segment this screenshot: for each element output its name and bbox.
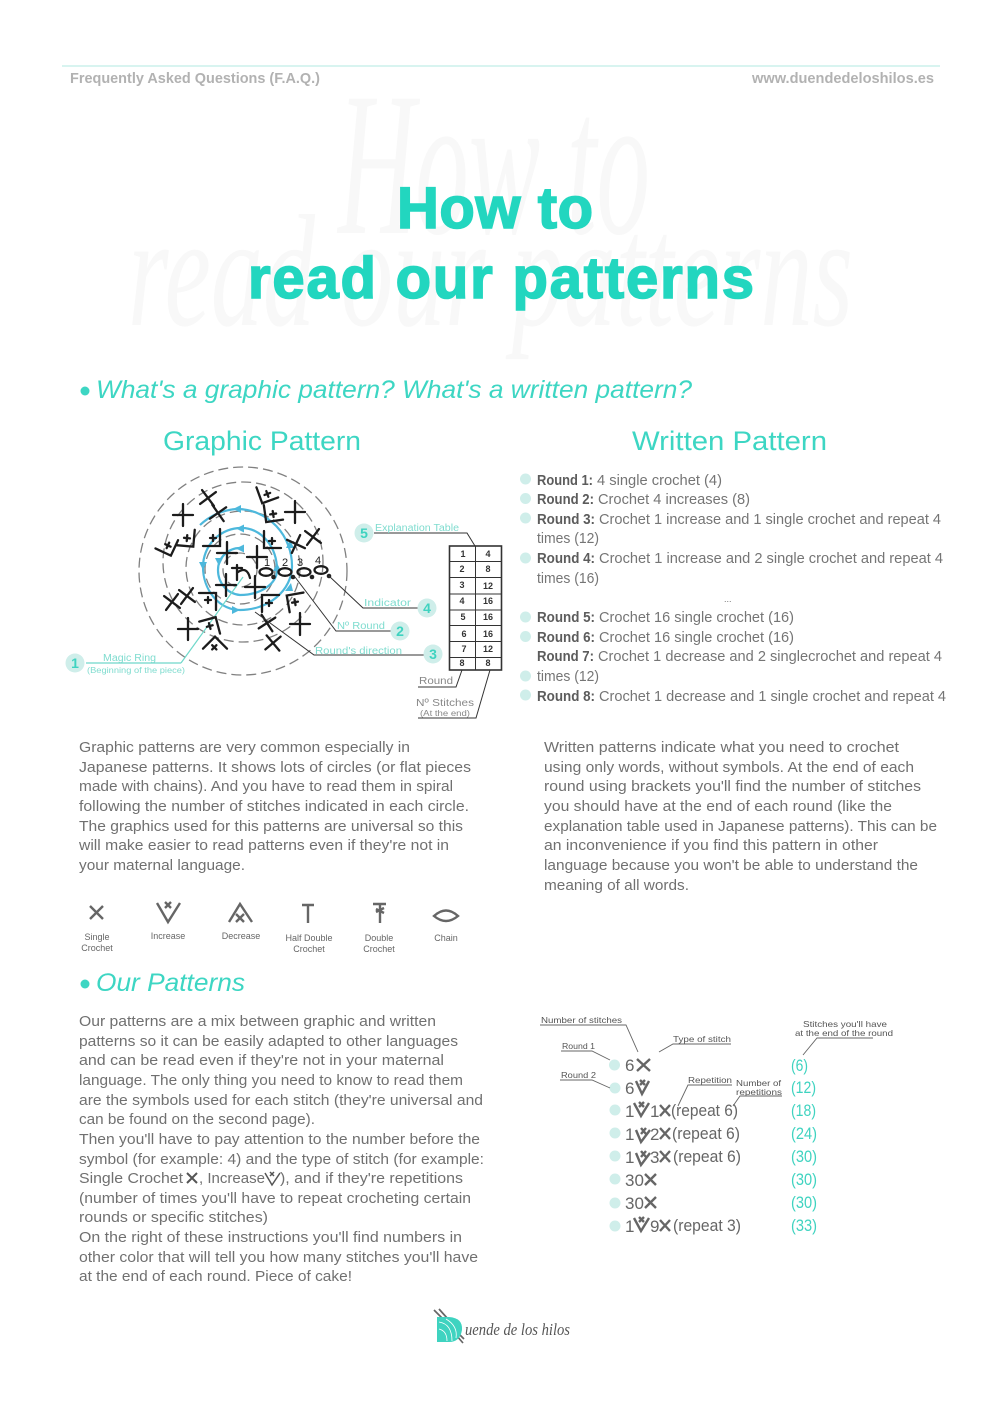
callout 4: indicator: Indicator <box>364 598 412 609</box>
logo: uende de los hilos <box>465 1320 570 1339</box>
header right text: www.duendedeloshilos.es <box>751 70 934 87</box>
section heading: our patterns: Our Patterns <box>96 969 245 997</box>
explanation table: 2 <box>459 564 465 574</box>
table label: round <box>418 670 462 687</box>
annotated pattern example: (repeat 6) <box>672 1124 740 1143</box>
explanation table: 8 <box>485 564 491 574</box>
annotated pattern example: 1 <box>625 1102 634 1121</box>
icon: double crochet: Crochet <box>363 944 395 954</box>
explanation table: 12 <box>483 644 493 654</box>
annotated pattern example: 1 <box>625 1217 634 1236</box>
written pattern list: Round 6: <box>537 629 595 646</box>
chain stitches and magic ring <box>232 565 328 580</box>
text block: written pattern explanation: round using brackets you'll find the number of stitches <box>544 778 921 795</box>
text block: graphic pattern explanation: made with chains). And you have to read them in spiral <box>79 778 453 795</box>
callout 5: explanation table <box>354 523 475 546</box>
icon: decrease: Decrease <box>222 931 260 941</box>
increase stitches <box>155 481 306 661</box>
callout 5: explanation table: 5 <box>360 525 368 541</box>
pattern annotations: Repetition <box>688 1075 732 1085</box>
icon: increase <box>151 902 185 941</box>
written pattern list: Crochet 1 decrease and 2 singlecrochet and repeat 4 <box>598 648 942 665</box>
annotated pattern example: (30) <box>791 1147 817 1166</box>
callout 3: round direction: Round's direction <box>315 646 402 657</box>
icon: double crochet: Double <box>365 933 393 943</box>
text block: written pattern explanation: using only words, without symbols. At the end of each <box>544 759 914 776</box>
annotated pattern example: 3 <box>650 1148 659 1167</box>
text block: graphic pattern explanation: will make easier to read patterns even if they're not in <box>78 837 449 854</box>
text block: our patterns explanation: other color that will tell you how many stitches you'll have <box>79 1249 478 1266</box>
magic ring pointer <box>181 577 243 663</box>
icon: double crochet <box>363 904 395 954</box>
written pattern list: Round 3: <box>537 511 595 528</box>
annotated pattern example: 30 <box>625 1194 644 1213</box>
written pattern list: Round 5: <box>537 609 595 626</box>
text block: written pattern explanation: language because you won't be able to understand the <box>544 857 918 874</box>
explanation table: 5 <box>460 612 466 622</box>
text block: written pattern explanation: you should have at the end of each round (like the <box>544 798 892 815</box>
annotated pattern example: (6) <box>791 1056 808 1075</box>
written pattern list: Crochet 1 decrease and 1 single crochet and repeat 4 <box>599 688 946 705</box>
section heading: graphic and written: What's a graphic pattern? What's a written pattern? <box>96 376 692 404</box>
written pattern list: Round 4: <box>537 550 595 567</box>
annotated pattern example: (repeat 6) <box>673 1147 741 1166</box>
icon: single crochet: Single <box>84 932 110 942</box>
written pattern list <box>520 472 946 705</box>
round direction spiral <box>199 505 294 614</box>
icon: chain: Chain <box>434 933 458 943</box>
icon: half double crochet: Half Double <box>285 933 333 943</box>
text block: written pattern explanation: Written patterns indicate what you need to crochet <box>544 739 900 756</box>
annotated pattern example: 1 <box>650 1102 659 1121</box>
text block: our patterns explanation: and can be read even if they're not in your maternal <box>79 1052 444 1069</box>
explanation table: 12 <box>483 581 493 591</box>
text block: our patterns explanation: (number of times you'll have to repeat crocheting certain <box>79 1190 471 1207</box>
pattern annotations: Number of <box>736 1078 782 1088</box>
text block: our patterns explanation: Our patterns are a mix between graphic and written <box>79 1013 436 1030</box>
written pattern list: Crochet 1 increase and 1 single crochet and repeat 4 <box>599 511 941 528</box>
callout 2: round number <box>295 577 410 640</box>
header rule <box>62 65 940 67</box>
text block: graphic pattern explanation: following the number of stitches indicated in each circle. <box>79 798 469 815</box>
annotated pattern example: (repeat 3) <box>673 1216 741 1235</box>
callout 4: indicator <box>329 576 436 618</box>
explanation table: 3 <box>459 580 465 590</box>
explanation table: 4 <box>485 549 491 559</box>
text block: our patterns explanation: , Increase <box>199 1170 265 1187</box>
text block: graphic pattern explanation: Japanese patterns. It shows lots of circles (or flat pieces <box>79 759 471 776</box>
callout 1: magic ring: Magic Ring <box>103 653 156 664</box>
chart: crochet circle diagram <box>139 467 347 675</box>
written pattern list: ... <box>724 594 732 604</box>
callout 5: explanation table: Explanation Table <box>375 523 459 534</box>
text block: our patterns explanation: ), and if they're repetitions <box>280 1170 463 1187</box>
text block: our patterns explanation: at the end of each round. Piece of cake! <box>79 1268 352 1285</box>
text block: written pattern explanation: explanation table used in Japanese patterns). This can be <box>544 818 937 835</box>
pattern annotations: at the end of the round <box>795 1028 893 1038</box>
pattern annotations: repetitions <box>736 1087 782 1097</box>
watermark script title <box>128 51 853 360</box>
explanation table: 4 <box>459 596 465 606</box>
annotated pattern example <box>609 1056 817 1236</box>
logo <box>434 1309 570 1343</box>
icon: half double crochet: Crochet <box>293 944 325 954</box>
written pattern list: Crochet 1 increase and 2 single crochet and repeat 4 <box>599 550 943 567</box>
stitch legend <box>81 902 458 954</box>
text block: written pattern explanation <box>544 739 937 894</box>
callout 4: indicator: 4 <box>423 600 431 616</box>
explanation table: 16 <box>483 596 493 606</box>
chart: crochet circle diagram: 2 <box>282 557 288 569</box>
text block: our patterns explanation: Single Crochet <box>79 1170 184 1187</box>
pattern annotations: Type of stitch <box>673 1034 731 1044</box>
icon: chain <box>434 910 458 943</box>
written pattern list: times (16) <box>537 570 599 587</box>
text block: graphic pattern explanation: The graphics used for this patterns are universal so this <box>79 818 463 835</box>
chart: crochet circle diagram: 4 <box>315 555 321 567</box>
text block: graphic pattern explanation <box>78 739 471 874</box>
text block: our patterns explanation: patterns so it can be easily adapted to other languages <box>79 1033 458 1050</box>
written pattern list: Crochet 16 single crochet (16) <box>599 609 794 626</box>
heading: graphic pattern: Graphic Pattern <box>163 426 361 456</box>
annotated pattern example: (30) <box>791 1170 817 1189</box>
annotated pattern example: (33) <box>791 1216 817 1235</box>
table label: number of stitches: (At the end) <box>420 708 470 718</box>
written pattern list: times (12) <box>537 668 599 685</box>
annotated pattern example: 6 <box>625 1056 634 1075</box>
written pattern list: 4 single crochet (4) <box>597 472 722 489</box>
text block: our patterns explanation: Then you'll have to pay attention to the number before the <box>79 1131 480 1148</box>
written pattern list: Round 7: <box>537 648 594 665</box>
title <box>248 176 754 311</box>
text block: our patterns explanation: symbol (for example: 4) and the type of stitch (for example: <box>79 1151 484 1168</box>
annotated pattern example: 30 <box>625 1171 644 1190</box>
icon: yarn ball with needles <box>434 1309 464 1343</box>
written pattern list: Round 2: <box>537 491 594 508</box>
pattern annotations: Round 1 <box>562 1041 595 1051</box>
explanation table: 7 <box>461 644 467 654</box>
explanation table: 1 <box>460 549 466 559</box>
written pattern list: Round 8: <box>537 688 595 705</box>
callout 3: round direction <box>255 612 442 664</box>
annotated pattern example: 6 <box>625 1079 634 1098</box>
callout 1: magic ring: 1 <box>71 655 79 671</box>
title: read our patterns <box>248 246 754 311</box>
annotated pattern example: 1 <box>625 1125 634 1144</box>
pattern annotations <box>540 1015 893 1106</box>
text block: our patterns explanation: rounds or specific stitches) <box>79 1209 268 1226</box>
icon: single crochet: Crochet <box>81 943 113 953</box>
pattern annotations: Number of stitches <box>541 1015 622 1025</box>
callout 3: round direction: 3 <box>429 646 437 662</box>
callout 1: magic ring <box>66 653 185 675</box>
annotated pattern example: (12) <box>791 1078 816 1097</box>
explanation table: 6 <box>461 629 467 639</box>
callout 1: magic ring: (Beginning of the piece) <box>87 666 185 675</box>
annotated pattern example: 2 <box>650 1125 659 1144</box>
callout 2: round number: 2 <box>396 623 404 639</box>
annotated pattern example: (24) <box>791 1124 817 1143</box>
written pattern list: times (12) <box>537 530 599 547</box>
text block: our patterns explanation: language. The only thing you need to know to read them <box>79 1072 463 1089</box>
table label: number of stitches <box>416 670 490 718</box>
explanation table: 8 <box>485 658 491 668</box>
annotated pattern example: (repeat 6) <box>671 1101 738 1120</box>
icon: decrease <box>222 904 260 941</box>
table label: round: Round <box>419 675 453 687</box>
callout 2: round number: Nº Round <box>337 621 385 632</box>
written pattern list: Crochet 16 single crochet (16) <box>599 629 794 646</box>
written pattern list: Crochet 4 increases (8) <box>598 491 750 508</box>
title: How to <box>397 176 593 241</box>
heading: written pattern: Written Pattern <box>632 426 827 456</box>
explanation table: 8 <box>459 658 465 668</box>
text block: graphic pattern explanation: Graphic patterns are very common especially in <box>79 739 410 756</box>
explanation table <box>450 546 502 670</box>
text block: written pattern explanation: an inconvenience if you find this pattern in other <box>544 837 878 854</box>
chart: crochet circle diagram: 3 <box>297 557 303 569</box>
text block: written pattern explanation: meaning of all words. <box>544 877 689 894</box>
single crochet stitches <box>164 490 321 651</box>
pattern annotations: Round 2 <box>561 1070 596 1080</box>
annotated pattern example: 1 <box>625 1148 634 1167</box>
text block: our patterns explanation: can be found on the second page). <box>79 1111 315 1128</box>
icon: single crochet <box>81 906 113 953</box>
written pattern list: Round 1: <box>537 472 593 489</box>
pattern annotations: Stitches you'll have <box>803 1019 887 1029</box>
watermark script title: How to <box>336 51 650 278</box>
table label: number of stitches: Nº Stitches <box>416 698 474 709</box>
explanation table: 16 <box>483 612 493 622</box>
header left text: Frequently Asked Questions (F.A.Q.) <box>70 70 320 87</box>
annotated pattern example: (18) <box>791 1101 816 1120</box>
icon: increase: Increase <box>151 931 185 941</box>
annotated pattern example: 9 <box>650 1217 659 1236</box>
text block: our patterns explanation: On the right of these instructions you'll find numbers in <box>79 1229 462 1246</box>
text block: our patterns explanation: are the symbols used for each stitch (they're universal and <box>79 1092 483 1109</box>
text block: graphic pattern explanation: your maternal language. <box>79 857 245 874</box>
chart: crochet circle diagram: 1 <box>264 557 270 569</box>
text block: our patterns explanation <box>79 1013 484 1285</box>
explanation table: 16 <box>483 629 493 639</box>
annotated pattern example: (30) <box>791 1193 817 1212</box>
icon: half double crochet <box>285 905 333 954</box>
